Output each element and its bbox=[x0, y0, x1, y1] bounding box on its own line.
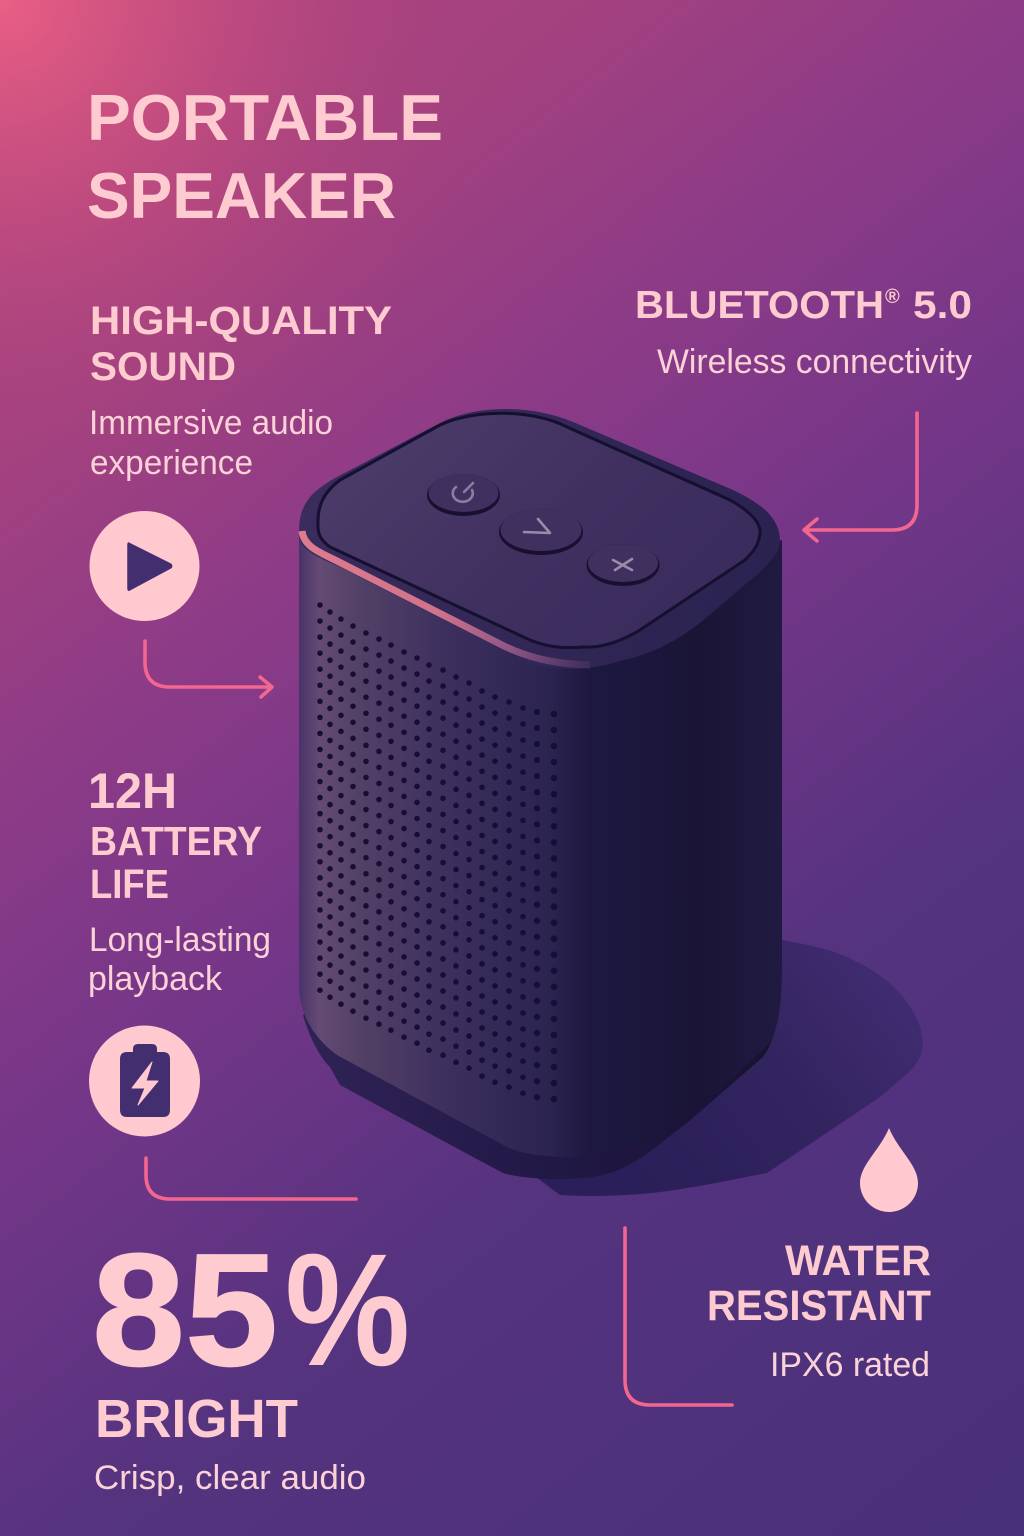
heading: high-quality sound: HIGH-QUALITY bbox=[90, 299, 392, 343]
heading: bright: BRIGHT bbox=[95, 1389, 298, 1449]
description: wireless connectivity: Wireless connectivity bbox=[657, 343, 972, 381]
heading: high-quality sound bbox=[90, 299, 392, 389]
stat: 85% bright bbox=[92, 1220, 410, 1497]
title bbox=[87, 81, 443, 232]
feature: 12h battery life bbox=[88, 763, 356, 1199]
button: close bbox=[586, 544, 660, 586]
title: PORTABLE bbox=[87, 81, 443, 154]
description: ipx6 rated: IPX6 rated bbox=[770, 1346, 930, 1384]
arrow: to speaker top bbox=[804, 413, 917, 541]
speaker body bbox=[299, 535, 782, 1157]
button: power bbox=[427, 474, 500, 516]
heading: bluetooth 5.0: 5.0 bbox=[913, 284, 972, 327]
big number bbox=[92, 1220, 410, 1399]
speaker lid rim bbox=[299, 409, 780, 669]
speaker grille dots bbox=[320, 605, 554, 1103]
icon: battery bbox=[89, 1026, 200, 1136]
speaker lid pink highlight bbox=[302, 531, 590, 665]
description: long-lasting playback: playback bbox=[88, 960, 223, 998]
big number: 85 bbox=[92, 1220, 278, 1399]
description: immersive audio experience: Immersive audio bbox=[89, 404, 333, 442]
feature: water resistant bbox=[625, 1128, 931, 1405]
heading: water resistant: WATER bbox=[785, 1237, 931, 1285]
connector line: battery to stat bbox=[146, 1158, 356, 1199]
heading: 12h battery life bbox=[88, 763, 262, 907]
speaker shadow bbox=[500, 940, 923, 1196]
big number: % bbox=[285, 1220, 410, 1399]
arrow: to speaker grille bbox=[145, 641, 272, 697]
heading: 12h battery life: BATTERY bbox=[90, 818, 262, 864]
speaker bbox=[299, 409, 782, 1179]
heading: bluetooth 5.0: ® bbox=[885, 286, 900, 308]
icon: water drop bbox=[860, 1128, 918, 1212]
feature: bluetooth 5.0 bbox=[635, 284, 972, 541]
speaker base bbox=[303, 1000, 780, 1179]
connector line: water resistant bbox=[625, 1228, 732, 1405]
feature: high-quality sound bbox=[89, 299, 392, 697]
description: immersive audio experience bbox=[89, 404, 333, 482]
description: immersive audio experience: experience bbox=[90, 444, 253, 482]
description: long-lasting playback bbox=[88, 921, 271, 998]
title: SPEAKER bbox=[87, 159, 396, 232]
heading: 12h battery life: 12H bbox=[88, 763, 177, 819]
heading: high-quality sound: SOUND bbox=[90, 345, 236, 389]
heading: 12h battery life: LIFE bbox=[90, 861, 169, 907]
speaker top plate bbox=[318, 413, 760, 648]
description: crisp clear audio: Crisp, clear audio bbox=[94, 1459, 366, 1497]
button: next bbox=[499, 509, 583, 555]
icon: play button bbox=[90, 511, 200, 621]
heading: water resistant: RESISTANT bbox=[707, 1282, 931, 1330]
description: long-lasting playback: Long-lasting bbox=[89, 921, 271, 959]
heading: water resistant bbox=[707, 1237, 931, 1330]
heading: bluetooth 5.0: BLUETOOTH bbox=[635, 284, 884, 327]
